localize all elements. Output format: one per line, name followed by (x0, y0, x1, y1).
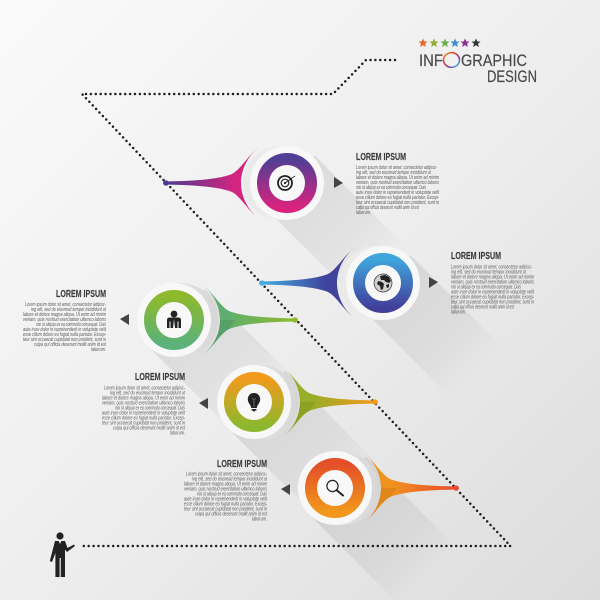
text block 2 (451, 264, 534, 316)
text block 3: culpa qui officia deserunt mollit anim id est (34, 342, 106, 348)
heading 4: LOREM IPSUM (135, 371, 185, 383)
disc 2 (339, 246, 420, 320)
heading 3: LOREM IPSUM (56, 288, 106, 300)
text block 5: teur sint occaecat cupidatat non proident, sunt in (184, 506, 267, 512)
text block 4: teur sint occaecat cupidatat non proident, sunt in (102, 420, 185, 426)
logo wordmark: DESIGN (487, 67, 537, 86)
text block 5: esse cillum dolore eu fugiat nulla pariatur. Excep- (184, 502, 267, 508)
logo wordmark: INF (419, 51, 443, 70)
text block 2: esse cillum dolore eu fugiat nulla pariatur. Excep- (451, 294, 534, 300)
text block 3: aute irure dolor in reprehenderit in voluptate velit (23, 327, 106, 333)
disc 5 (298, 451, 379, 525)
icon: light bulb (248, 393, 260, 412)
text block 3: nisi ut aliquip ex ea commodo consequat. Duis (36, 322, 106, 328)
text block 2: aute irure dolor in reprehenderit in voluptate velit (451, 290, 534, 296)
logo wordmark (419, 51, 537, 86)
icon: person (167, 311, 181, 328)
tail 5 (364, 453, 459, 523)
logo (418, 38, 537, 86)
tail 4 (283, 367, 378, 437)
text block 2: veniam, quis nostrud exercitation ullamco laboris (451, 280, 534, 286)
text block 3 (23, 302, 106, 353)
step 3: person (137, 283, 298, 357)
text block 1: culpa qui officia deserunt mollit anim id est (356, 205, 419, 211)
step 2: globe (259, 246, 420, 320)
text block 4: aute irure dolor in reprehenderit in voluptate velit (102, 410, 185, 416)
text block 4: labore et dolore magna aliqua. Ut enim ad minim (102, 396, 185, 402)
text block 4: culpa qui officia deserunt mollit anim id est (113, 426, 185, 432)
logo stars (418, 38, 481, 47)
long shadows (148, 155, 503, 600)
text block 2: laborum. (451, 310, 466, 316)
text block 1: veniam, quis nostrud exercitation ullamco laboris (356, 180, 439, 186)
arrow 4 (199, 398, 208, 409)
step 4: light bulb (217, 365, 378, 439)
text block 1 (356, 165, 439, 216)
text block 3: esse cillum dolore eu fugiat nulla pariatur. Excep- (23, 332, 106, 338)
text block 5: nisi ut aliquip ex ea commodo consequat. Duis (197, 492, 267, 498)
step 1: target (163, 146, 324, 220)
disc 4 (217, 365, 298, 439)
heading 5: LOREM IPSUM (217, 458, 267, 470)
text block 1: laborum. (356, 210, 371, 216)
icon: magnifier (327, 480, 343, 496)
logo wordmark: GRAPHIC (461, 51, 527, 70)
arrow 1 (334, 177, 343, 188)
text block 2: teur sint occaecat cupidatat non proident, sunt in (451, 300, 534, 306)
text block 3: labore et dolore magna aliqua. Ut enim ad minim (23, 312, 106, 318)
text block 1: labore et dolore magna aliqua. Ut enim ad minim (356, 175, 439, 181)
text block 3: Lorem ipsum dolor sit amet, consectetur adipisc- (25, 302, 106, 308)
text block 2: nisi ut aliquip ex ea commodo consequat. Duis (451, 284, 521, 290)
text block 5: culpa qui officia deserunt mollit anim id est (195, 512, 267, 518)
text block 5: laborum. (252, 516, 267, 522)
text block 2: labore et dolore magna aliqua. Ut enim ad minim (451, 274, 534, 280)
text block 3: veniam, quis nostrud exercitation ullamco laboris (23, 317, 106, 323)
text block 5: Lorem ipsum dolor sit amet, consectetur adipisc- (186, 472, 267, 478)
heading 1: LOREM IPSUM (356, 151, 406, 163)
text block 4: esse cillum dolore eu fugiat nulla pariatur. Excep- (102, 416, 185, 422)
text block 4: nisi ut aliquip ex ea commodo consequat. Duis (115, 406, 185, 412)
text block 1: Lorem ipsum dolor sit amet, consectetur adipisc- (356, 165, 437, 171)
arrow 2 (429, 277, 438, 288)
text block 4: veniam, quis nostrud exercitation ullamco laboris (102, 400, 185, 406)
text block 5: aute irure dolor in reprehenderit in voluptate velit (184, 496, 267, 502)
arrow 3 (120, 314, 129, 325)
text block 4 (102, 386, 185, 436)
text block 2: ing elit, sed do eiusmod tempor incididunt ut (451, 270, 526, 276)
step 5: magnifier (298, 451, 459, 525)
icon: presenter figure (50, 532, 75, 577)
text block 3: laborum. (91, 347, 106, 353)
heading 2: LOREM IPSUM (451, 250, 501, 262)
text block 2: culpa qui officia deserunt mollit anim id est (451, 304, 514, 310)
text block 5: ing elit, sed do eiusmod tempor incididunt ut (192, 476, 267, 482)
dotted timeline (80, 60, 510, 546)
text block 4: Lorem ipsum dolor sit amet, consectetur adipisc- (104, 386, 185, 392)
tail 1 (163, 148, 258, 218)
tail 2 (259, 248, 354, 318)
text block 1: esse cillum dolore eu fugiat nulla pariatur. Excep- (356, 195, 439, 201)
arrow 5 (281, 484, 290, 495)
disc 3 (137, 283, 218, 357)
text block 2: Lorem ipsum dolor sit amet, consectetur adipisc- (451, 264, 532, 270)
icon: globe (374, 274, 392, 292)
text block 5: labore et dolore magna aliqua. Ut enim ad minim (184, 482, 267, 488)
text block 4: ing elit, sed do eiusmod tempor incididunt ut (110, 390, 185, 396)
text block 1: aute irure dolor in reprehenderit in voluptate velit (356, 190, 439, 196)
text block 3: ing elit, sed do eiusmod tempor incididunt ut (31, 307, 106, 313)
text block 1: nisi ut aliquip ex ea commodo consequat. Duis (356, 185, 426, 191)
text block 3: teur sint occaecat cupidatat non proident, sunt in (23, 337, 106, 343)
text block 1: ing elit, sed do eiusmod tempor incididunt ut (356, 170, 431, 176)
tail 3 (203, 285, 298, 355)
text block 4: laborum. (170, 430, 185, 436)
text block 5: veniam, quis nostrud exercitation ullamco laboris (184, 486, 267, 492)
icon: target (278, 176, 295, 190)
disc 1 (243, 146, 324, 220)
text block 1: teur sint occaecat cupidatat non proident, sunt in (356, 200, 439, 206)
text block 5 (184, 472, 267, 522)
